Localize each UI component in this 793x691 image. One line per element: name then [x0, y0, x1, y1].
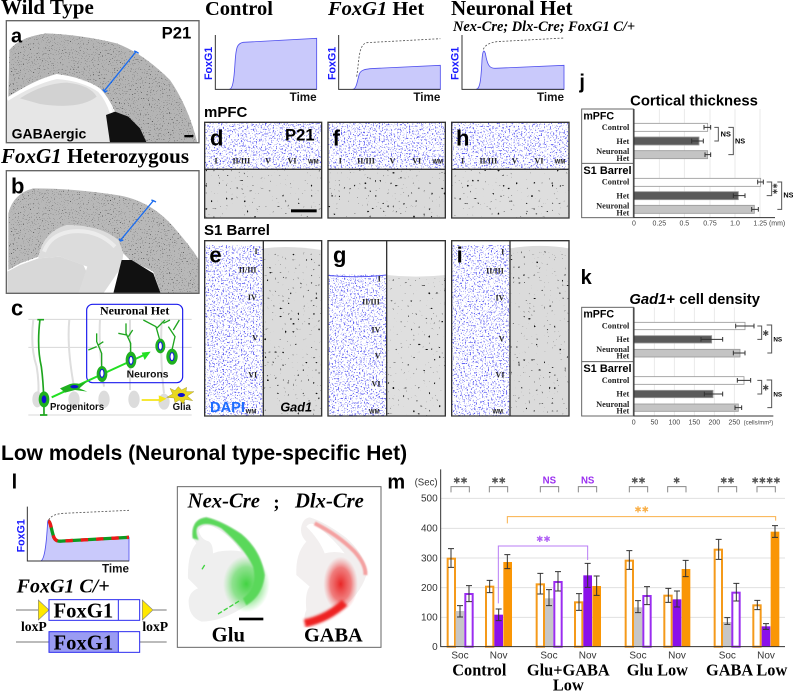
chart j: cortical thickness: mPFC	[583, 110, 614, 122]
gene construct: loxP	[21, 619, 47, 634]
panel g: I	[378, 274, 381, 283]
curve: FoxG1 Het: FoxG1	[326, 47, 338, 80]
chart j: cortical thickness: j	[578, 72, 585, 94]
panel c: neuron lineage diagram: Glia	[173, 402, 192, 413]
chart m: behaviour bars: Soc	[719, 651, 736, 662]
panel d: I	[214, 156, 218, 165]
label: S1 Barrel: S1 Barrel	[204, 222, 270, 239]
chart m: behaviour bars: GABA Low	[706, 661, 787, 680]
significance brackets: NS	[581, 476, 595, 487]
panel e: I	[254, 247, 258, 256]
gene construct: loxP	[142, 619, 168, 634]
panel g: II/III	[362, 298, 380, 307]
panel g: V	[375, 351, 381, 360]
panel d: P21	[285, 126, 315, 145]
chart k: Gad1+ cell density: NS	[773, 336, 782, 343]
panel f: WM	[432, 159, 443, 165]
panel: Nex-Cre and Dlx-Cre brains: Dlx-Cre	[294, 491, 364, 513]
chart m: behaviour bars: Glu+GABA	[527, 661, 610, 680]
panel g: VI	[372, 380, 380, 389]
panel i: I	[501, 248, 504, 257]
chart k: Gad1+ cell density: 0	[632, 419, 636, 426]
subheading: Cre genotype: Nex-Cre; Dlx-Cre; FoxG1 C/+	[452, 19, 635, 35]
panel f: f	[333, 126, 341, 151]
chart j: cortical thickness: 0	[632, 221, 636, 228]
chart k: Gad1+ cell density: 200	[709, 419, 720, 426]
chart m: behaviour bars: Nov	[579, 651, 597, 662]
panel c: neuron lineage diagram: Neurons	[127, 369, 169, 380]
significance brackets: ✱✱✱✱	[751, 476, 781, 486]
chart m: behaviour bars: (Sec)	[415, 477, 438, 488]
significance brackets: NS	[543, 476, 557, 487]
label: mPFC: mPFC	[204, 104, 248, 121]
section title: Low models: Low models (Neuronal type-specific Het)	[1, 442, 407, 465]
chart j: cortical thickness: Het	[616, 191, 630, 200]
chart k: Gad1+ cell density: Gad1+ cell density	[629, 292, 761, 308]
chart k: Gad1+ cell density: Control	[602, 322, 630, 331]
chart j: cortical thickness: Het	[616, 154, 630, 163]
panel i: i	[457, 243, 463, 268]
chart m: behaviour bars: Glu Low	[627, 661, 688, 680]
panel a: wild type brain section: GABAergic	[12, 125, 86, 141]
panel f: I	[339, 156, 342, 165]
chart m: behaviour bars: 200	[421, 583, 438, 594]
chart k: Gad1+ cell density: Het	[616, 390, 630, 399]
panel e: V	[252, 334, 258, 343]
panel a: wild type brain section: P21	[162, 23, 191, 42]
chart k: Gad1+ cell density: Het	[616, 352, 630, 361]
significance brackets: ✱✱	[453, 476, 468, 486]
panel f	[328, 122, 445, 218]
significance brackets	[451, 476, 781, 603]
heading: FoxG1 Heterozygous: FoxG1 Heterozygous	[0, 144, 189, 168]
panel i: II/III	[486, 266, 504, 275]
panel g: g	[333, 243, 346, 268]
panel g: WM	[369, 409, 380, 415]
FoxG1 expression curves	[203, 35, 565, 104]
panel c: neuron lineage diagram	[11, 296, 194, 415]
curve: Neuronal Het: FoxG1	[450, 47, 462, 80]
chart m: behaviour bars	[387, 469, 787, 691]
panel b: heterozygous brain section: b	[11, 173, 24, 198]
chart k: Gad1+ cell density: ✱	[762, 384, 769, 393]
panel c: neuron lineage diagram: Progenitors	[50, 402, 104, 413]
chart j: cortical thickness: 1.0	[730, 221, 740, 228]
chart m: behaviour bars: 100	[421, 613, 438, 624]
chart j: cortical thickness: NS	[735, 137, 745, 146]
chart j: cortical thickness: Neuronal	[596, 147, 630, 156]
chart k: Gad1+ cell density: mPFC	[583, 309, 614, 321]
gene construct: FoxG1	[53, 632, 113, 654]
chart j: cortical thickness: 0.5	[679, 221, 689, 228]
chart m: behaviour bars: 0	[432, 642, 438, 653]
chart m: behaviour bars: 400	[421, 524, 438, 535]
panel: Nex-Cre and Dlx-Cre brains: GABA	[304, 625, 363, 647]
chart k: Gad1+ cell density: (cells/mm²)	[744, 420, 773, 426]
curve: Neuronal Het	[450, 35, 565, 104]
chart j: cortical thickness: Control	[602, 177, 630, 186]
chart k: Gad1+ cell density: 150	[689, 419, 700, 426]
panel e: e	[209, 243, 222, 268]
chart k: Gad1+ cell density: k	[581, 267, 593, 289]
chart j: cortical thickness: Neuronal	[596, 202, 630, 211]
significance brackets: ✱✱	[491, 476, 506, 486]
chart j: cortical thickness	[578, 72, 793, 228]
curve: low model	[15, 507, 130, 576]
panel h: I	[461, 156, 464, 165]
gene construct	[16, 576, 168, 654]
panel e	[205, 241, 322, 416]
significance brackets: ✱✱	[631, 476, 646, 486]
panel d: WM	[308, 159, 319, 165]
chart m: behaviour bars: 500	[421, 494, 438, 505]
chart k: Gad1+ cell density: S1 Barrel	[583, 363, 632, 375]
curve: low model: Time	[102, 563, 130, 576]
panel i: IV	[496, 294, 505, 303]
chart m: behaviour bars: m	[387, 472, 405, 494]
chart m: behaviour bars: Soc	[629, 651, 647, 662]
curve: Control: Time	[290, 91, 317, 104]
significance brackets: ✱✱	[536, 535, 551, 545]
chart j: cortical thickness: Het	[616, 209, 630, 218]
panel f: II/III	[357, 156, 375, 165]
chart k: Gad1+ cell density: ✱	[762, 329, 769, 338]
curve: Neuronal Het: Time	[537, 91, 565, 104]
chart k: Gad1+ cell density: NS	[773, 391, 782, 398]
curve: Control	[203, 35, 317, 104]
panel l: construct and curve: l	[12, 471, 17, 493]
chart m: behaviour bars: Nov	[757, 651, 775, 662]
panel c: neuron lineage diagram: c	[11, 296, 23, 321]
panels d, f, h: mPFC sections	[205, 122, 569, 218]
chart k: Gad1+ cell density: 50	[650, 419, 658, 426]
panel: Nex-Cre and Dlx-Cre brains: ;	[273, 492, 280, 513]
panel d: II/III	[232, 156, 250, 165]
chart k: Gad1+ cell density: Neuronal	[596, 400, 630, 409]
panel f: V	[389, 156, 395, 165]
panel: Nex-Cre and Dlx-Cre brains: Nex-Cre	[187, 491, 260, 513]
panel: Nex-Cre and Dlx-Cre brains	[177, 487, 381, 647]
panel b: heterozygous brain section	[6, 171, 199, 293]
curve: low model: FoxG1	[15, 519, 27, 552]
chart k: Gad1+ cell density: Het	[616, 407, 630, 416]
chart k: Gad1+ cell density: 100	[669, 419, 680, 426]
panel d: V	[265, 156, 271, 165]
curve: FoxG1 Het	[326, 35, 441, 104]
chart j: cortical thickness: Het	[616, 137, 630, 146]
panel a: wild type brain section	[6, 21, 199, 143]
panel e: Gad1	[280, 401, 312, 415]
brain: Nex-Cre green	[188, 517, 270, 622]
chart m: behaviour bars: Control	[452, 661, 507, 680]
chart m: behaviour bars: Soc	[540, 651, 558, 662]
panel i: VI	[496, 370, 504, 379]
chart j: cortical thickness: 1.25 (mm)	[753, 221, 785, 228]
panel h: VI	[535, 156, 543, 165]
chart k: Gad1+ cell density: Neuronal	[596, 345, 630, 354]
panel g: IV	[372, 325, 381, 334]
panel f: VI	[412, 156, 421, 165]
panel d: d	[210, 126, 223, 151]
curve: Control: FoxG1	[203, 47, 215, 80]
significance brackets: ✱	[673, 476, 680, 486]
panel i: V	[499, 334, 505, 343]
chart m: behaviour bars: Nov	[490, 651, 508, 662]
panel h: V	[512, 156, 518, 165]
chart j: cortical thickness: 0.25	[653, 221, 666, 228]
panel e: WM	[246, 409, 256, 415]
panel g	[328, 241, 445, 416]
panel h: h	[456, 126, 469, 151]
panel a: wild type brain section: a	[11, 26, 23, 48]
significance brackets: ✱✱	[634, 506, 649, 516]
error bars	[448, 526, 778, 629]
chart j: cortical thickness: Cortical thickness	[630, 93, 758, 109]
panel c: neuron lineage diagram: Neuronal Het	[100, 303, 169, 317]
chart j: cortical thickness: Control	[602, 123, 630, 132]
panels e, g, i: S1 barrel sections	[205, 241, 569, 416]
chart m: behaviour bars: Soc	[451, 651, 469, 662]
panel h: WM	[555, 159, 565, 165]
chart j: cortical thickness: ✱✱	[771, 183, 779, 194]
bars	[448, 532, 779, 647]
panel e: VI	[248, 370, 257, 379]
panel d	[205, 122, 322, 218]
chart k: Gad1+ cell density: 250	[729, 419, 740, 426]
curve: FoxG1 Het: Time	[413, 91, 441, 104]
chart m: behaviour bars: 300	[421, 553, 438, 564]
panel i	[452, 241, 569, 416]
gene construct: FoxG1 C/+	[16, 576, 110, 598]
chart k: Gad1+ cell density	[581, 267, 782, 426]
panel e: IV	[248, 293, 257, 302]
panel e: DAPI	[210, 400, 245, 416]
panel h: II/III	[479, 156, 497, 165]
gene construct: FoxG1	[53, 600, 113, 622]
panel h	[452, 122, 569, 218]
brain: Dlx-Cre red	[296, 517, 367, 625]
panel: Nex-Cre and Dlx-Cre brains: Glu	[212, 625, 245, 647]
chart m: behaviour bars: Nov	[668, 651, 686, 662]
chart k: Gad1+ cell density: Control	[602, 376, 630, 385]
chart k: Gad1+ cell density: Het	[616, 335, 630, 344]
panel l: construct and curve	[12, 471, 381, 654]
panel i: WM	[492, 409, 503, 415]
panel e: II/III	[239, 266, 257, 275]
chart j: cortical thickness: S1 Barrel	[583, 165, 632, 177]
chart j: cortical thickness: 0.75	[703, 221, 717, 228]
significance brackets: ✱✱	[720, 476, 735, 486]
chart j: cortical thickness: NS	[721, 129, 731, 138]
panel d: VI	[288, 156, 296, 165]
